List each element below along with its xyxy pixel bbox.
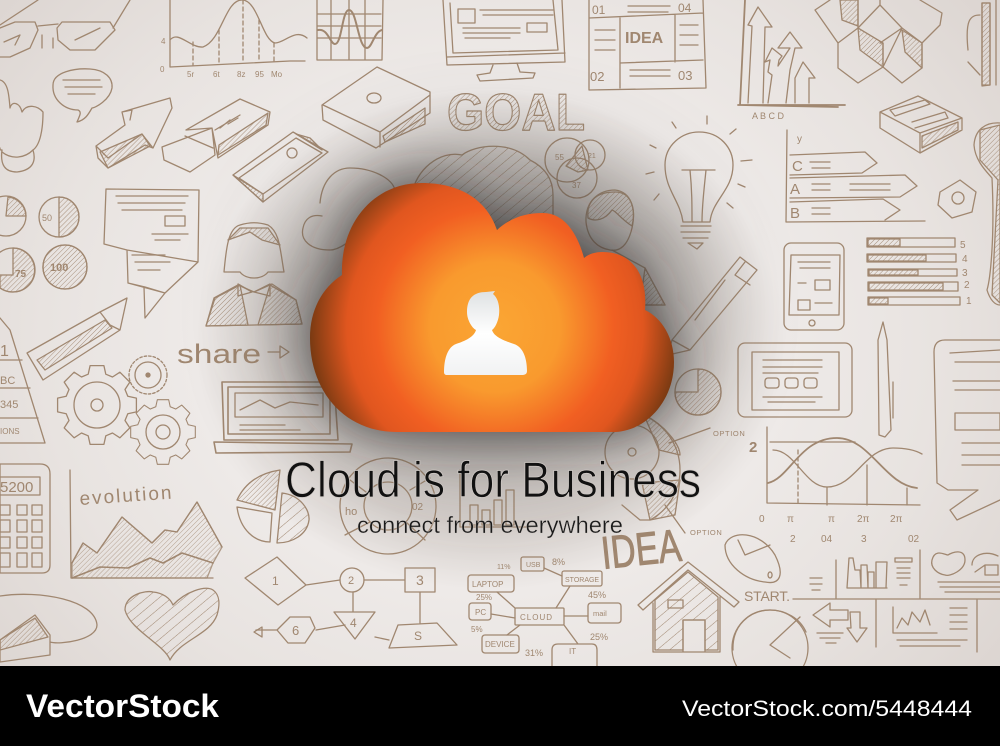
- arrow 3d: [96, 98, 172, 168]
- nut icon: [938, 180, 976, 218]
- pie circles: 50: [42, 213, 52, 223]
- curve chart: π: [787, 514, 794, 525]
- line chart: 0: [160, 65, 165, 74]
- bar arrows chart: C: [792, 158, 803, 175]
- venn: [545, 138, 605, 198]
- pie circles: 75: [15, 269, 27, 280]
- box device: [322, 67, 430, 148]
- line chart: 6t: [213, 70, 220, 79]
- phone with content: [784, 243, 844, 330]
- bar arrows chart: B: [790, 205, 800, 222]
- IDEA layout: 01: [592, 3, 606, 17]
- bar arrows chart: A: [790, 181, 800, 198]
- clock: [732, 588, 808, 686]
- pie 3d: [237, 470, 309, 543]
- pencil big: [668, 257, 757, 355]
- pie circles: [0, 196, 87, 292]
- clock: START.: [744, 588, 790, 604]
- cloud network: USB: [526, 562, 541, 569]
- outline cloud: [302, 168, 395, 250]
- curve chart: 2π: [857, 514, 870, 525]
- pie circles: 100: [50, 262, 68, 274]
- cloud network: IT: [569, 647, 576, 656]
- watermark right: VectorStock.com/5448444: [682, 696, 972, 721]
- curve chart: 0: [759, 514, 765, 525]
- circle dial: 02: [412, 502, 424, 513]
- arrow growth chart: [738, 0, 845, 121]
- cloud network: 31%: [525, 648, 543, 658]
- curve chart: 3: [861, 534, 867, 545]
- cubes: [815, 0, 942, 83]
- dashboard bottom right: [793, 550, 1000, 652]
- grid wave chart: [317, 0, 383, 60]
- bar arrows chart: [786, 130, 925, 222]
- shadow behind cloud: [290, 160, 690, 460]
- small pie: [675, 369, 721, 415]
- cloud network: 25%: [476, 593, 492, 602]
- cloud network: [468, 557, 621, 666]
- footer bar: [0, 666, 1000, 746]
- share label: share: [177, 339, 261, 369]
- curve chart: 2π: [890, 514, 903, 525]
- small bar chart: 4: [962, 254, 968, 265]
- flowchart: 2: [348, 575, 354, 587]
- pen: [878, 322, 893, 437]
- bar arrows chart: y: [797, 134, 802, 145]
- triangle pyramid: 1: [0, 343, 9, 360]
- icon: light bulb: [646, 116, 752, 249]
- line chart: 95: [255, 70, 264, 79]
- circle dial: [340, 458, 436, 554]
- curve chart: [749, 427, 922, 545]
- big pie dial: [605, 415, 745, 537]
- circle dial: ho: [345, 506, 357, 518]
- usb stick: [162, 99, 270, 172]
- flowchart: 6: [292, 623, 299, 638]
- speech bubble: [53, 69, 112, 122]
- pie bottom left: [0, 594, 97, 662]
- cloud network: PC: [475, 608, 486, 617]
- cloud network: mail: [593, 609, 607, 618]
- curve chart: 04: [821, 534, 833, 545]
- GOAL text: GOAL: [447, 84, 585, 142]
- venn: 37: [572, 181, 581, 190]
- pencil left: [27, 298, 127, 380]
- watermark left: VectorStock: [26, 688, 219, 724]
- gear bolt right: [967, 0, 996, 86]
- triangle pyramid: [0, 318, 45, 443]
- triangle pyramid: IONS: [0, 427, 20, 436]
- IDEA layout: 02: [590, 69, 604, 84]
- triangle pyramid: BC: [0, 375, 15, 387]
- line chart: 5r: [187, 70, 194, 79]
- evolution chart: [70, 470, 222, 578]
- cloud network: 8%: [552, 557, 565, 567]
- triangle pyramid: 345: [0, 399, 18, 411]
- curve chart: π: [828, 514, 835, 525]
- small bar chart: 2: [964, 280, 970, 291]
- cloud network: 45%: [588, 590, 606, 600]
- wrench right: [974, 123, 1000, 305]
- bar chart central: [460, 470, 530, 527]
- cloud network: 11%: [497, 564, 510, 571]
- icon: hand: [0, 80, 43, 172]
- curve chart: 2: [749, 439, 757, 456]
- IDEA layout: IDEA: [625, 30, 664, 47]
- small bar chart: 3: [962, 268, 968, 279]
- icon: person: [444, 291, 527, 375]
- small bar chart: 5: [960, 240, 966, 251]
- arrow growth chart: A B C D: [752, 111, 785, 121]
- venn: 55: [555, 153, 564, 162]
- tablet: [738, 343, 852, 417]
- line chart: [160, 0, 307, 79]
- big pie dial: OPTION: [713, 429, 745, 438]
- curve chart: 2: [790, 534, 796, 545]
- heart: [125, 588, 219, 660]
- cloud network: 25%: [590, 632, 608, 642]
- evolution chart: evolution: [79, 483, 172, 510]
- laptop: [214, 382, 352, 453]
- venn: 21: [588, 153, 596, 160]
- house: [638, 562, 739, 652]
- small bar chart: 1: [966, 296, 972, 307]
- woman: [206, 223, 302, 326]
- share label: [177, 339, 289, 369]
- cloud network: DEVICE: [485, 640, 515, 649]
- server box: [880, 96, 962, 153]
- icon: glasses: [0, 0, 130, 57]
- title: Cloud is for Business: [285, 452, 701, 508]
- cloud network: LAPTOP: [472, 580, 503, 589]
- line chart: Mo: [271, 70, 283, 79]
- cloud network: STORAGE: [565, 577, 599, 584]
- IDEA layout: 03: [678, 68, 692, 83]
- flowchart: 3: [416, 572, 424, 588]
- flowchart: S: [414, 629, 422, 643]
- line chart: 8z: [237, 70, 245, 79]
- mouse: [725, 535, 780, 583]
- curve chart: 02: [908, 534, 920, 545]
- phone: [233, 132, 328, 202]
- line chart: 4: [161, 37, 166, 46]
- cloud network: CLOUD: [520, 613, 553, 622]
- document speech: [934, 340, 1000, 520]
- calculator: [0, 464, 50, 573]
- subtitle: connect from everywhere: [357, 512, 623, 538]
- flowchart: 4: [350, 616, 357, 630]
- IDEA layout: [589, 0, 706, 90]
- gears: [58, 356, 195, 464]
- IDEA label: IDEA: [599, 519, 684, 579]
- calculator: 5200: [0, 479, 33, 496]
- flowchart: [245, 557, 457, 648]
- cloud: [310, 183, 674, 432]
- IDEA layout: 04: [678, 1, 692, 15]
- small bar chart: [867, 238, 972, 307]
- monitor: [443, 0, 565, 81]
- banner: [104, 189, 199, 318]
- cloud network: 5%: [471, 625, 483, 634]
- big pie dial: OPTION: [690, 528, 722, 537]
- hatched cloud: [412, 146, 553, 230]
- flowchart: 1: [272, 574, 279, 588]
- man: [586, 190, 665, 305]
